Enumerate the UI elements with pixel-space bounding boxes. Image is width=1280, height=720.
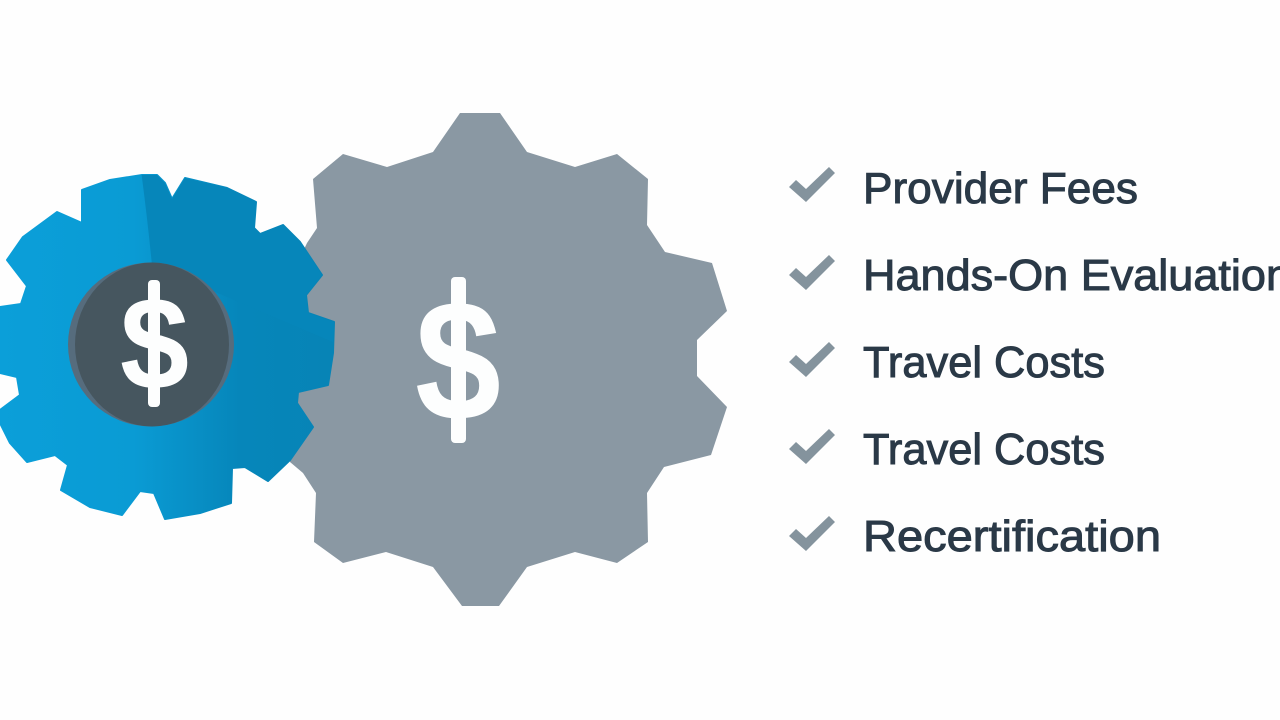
icon: blue gear with dollar coin	[0, 170, 340, 519]
checklist	[789, 164, 1280, 561]
item: Recertification: Recertification	[863, 512, 1161, 561]
item: Travel Costs: Travel Costs	[863, 338, 1105, 387]
item: Provider Fees: Provider Fees	[863, 164, 1138, 213]
infographic canvas	[0, 113, 1280, 606]
dollar sign on coin: $	[120, 270, 189, 417]
item: Hands-On Evaluation: Hands-On Evaluation	[863, 251, 1280, 300]
icon: large gray gear with dollar sign	[270, 113, 727, 606]
item: Travel Costs: Travel Costs	[863, 425, 1105, 474]
dollar sign on gray gear: $	[415, 265, 501, 457]
